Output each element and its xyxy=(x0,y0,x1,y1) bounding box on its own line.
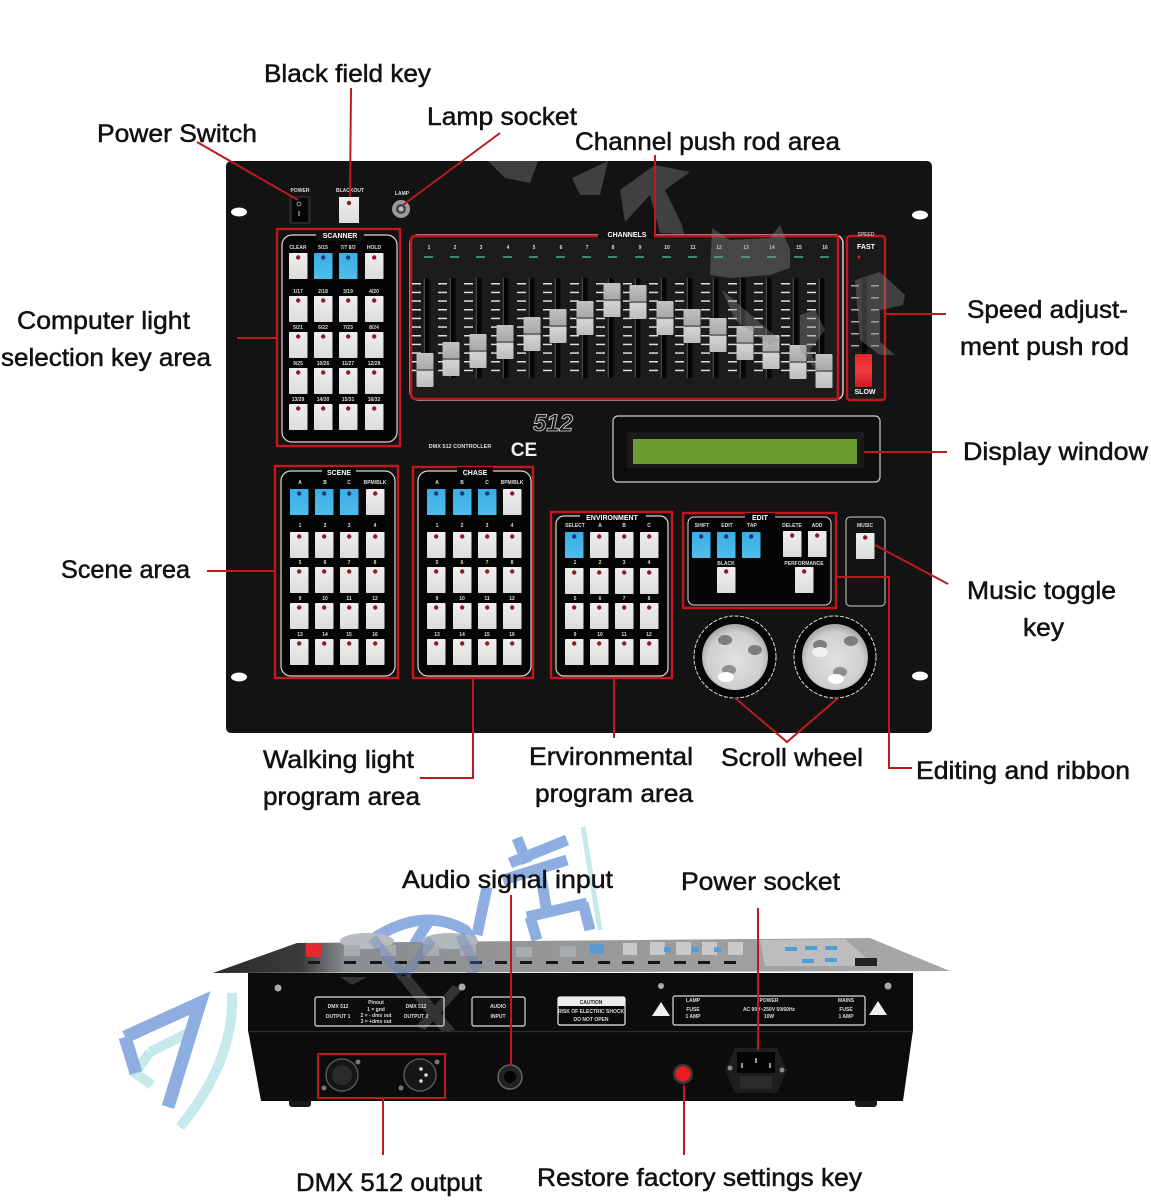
panel: environment keys: 11 xyxy=(621,632,627,638)
feet xyxy=(289,1098,877,1107)
panel: chase keys: 3 xyxy=(486,523,489,529)
panel: edit keys: SHIFT xyxy=(695,523,709,529)
panel: speed fader xyxy=(847,232,885,400)
logo 512 xyxy=(429,410,574,461)
panel: chase keys: 8 xyxy=(511,560,514,566)
panel: scene keys: 13 xyxy=(297,632,303,638)
panel: chase keys: 16 xyxy=(509,632,515,638)
label: music toggle: Music toggle xyxy=(967,577,1116,605)
power switch: POWER xyxy=(291,188,310,194)
panel: channel faders: 16 xyxy=(822,245,828,251)
panel: environment keys: 5 xyxy=(574,596,577,602)
panel: scanner keys: 11/27 xyxy=(342,361,354,367)
line: restore xyxy=(683,1085,685,1155)
label: dmx outputs: OUTPUT 1 xyxy=(326,1014,351,1020)
display window xyxy=(613,416,880,482)
label: audio input xyxy=(472,997,525,1026)
label: dmx outputs: 3 = +dmx out xyxy=(361,1019,392,1025)
line: channel push rod xyxy=(654,155,656,235)
label: environmental: Ervironmental xyxy=(529,743,693,771)
panel: scanner keys: 5/15 xyxy=(318,245,328,251)
audio jack xyxy=(498,1065,522,1089)
warning triangle right xyxy=(869,1001,887,1015)
label: computer light: Computer light xyxy=(17,307,190,335)
panel: edit keys: PERFORMANCE xyxy=(784,561,824,567)
label: power specs: 10W xyxy=(764,1014,774,1020)
panel: chase keys: BPM/BLK xyxy=(501,480,524,486)
panel: channel faders: 15 xyxy=(796,245,802,251)
label: caution xyxy=(558,997,625,1025)
music key: MUSIC xyxy=(857,523,873,529)
line: environment xyxy=(613,678,615,738)
label: selection area: selection key area xyxy=(1,344,211,372)
panel: edit keys: EDIT xyxy=(752,515,769,522)
label: dmx outputs: DMX 512 xyxy=(328,1004,349,1010)
fader caps xyxy=(416,283,832,388)
panel: chase keys: 9 xyxy=(436,596,439,602)
panel: chase keys: B xyxy=(460,480,464,486)
panel: scene keys: 4 xyxy=(374,523,377,529)
panel: chase keys: 4 xyxy=(511,523,514,529)
label: power specs: 1 AMP xyxy=(838,1014,854,1020)
fader tracks xyxy=(412,278,824,378)
panel: scanner keys: 8/24 xyxy=(369,325,379,331)
label: ment push rod: ment push rod xyxy=(960,333,1129,361)
panel: environment keys: ENVIRONMENT xyxy=(586,515,639,522)
panel: scanner keys: 6/22 xyxy=(318,325,328,331)
panel: environment keys: 1 xyxy=(574,560,577,566)
xlr female connector xyxy=(322,1059,360,1091)
panel: environment keys: A xyxy=(598,523,602,529)
label: scene area: Scene area xyxy=(61,556,190,584)
panel: scene keys: 9 xyxy=(299,596,302,602)
panel: scanner keys: 2/18 xyxy=(318,289,328,295)
panel: chase keys: 13 xyxy=(434,632,440,638)
line: scene xyxy=(207,570,275,572)
panel: speed fader: SPEED xyxy=(858,232,875,238)
label: dmx output: DMX 512 output xyxy=(296,1169,482,1197)
label: walking light: Walking light xyxy=(263,746,414,774)
body watermark xyxy=(340,975,462,1032)
line: music key xyxy=(875,545,948,584)
label: channel area: Channel push rod area xyxy=(575,128,840,156)
panel: edit keys: BLACK xyxy=(717,561,735,567)
panel: chase keys: 15 xyxy=(484,632,490,638)
power switch xyxy=(289,188,311,224)
panel: environment keys: 6 xyxy=(599,596,602,602)
scroll wheel left xyxy=(694,616,776,698)
line: power switch xyxy=(197,142,298,200)
rear body xyxy=(248,973,913,1101)
panel: rear view xyxy=(213,933,950,1107)
line: speed fader xyxy=(885,313,946,315)
panel: environment keys: SELECT xyxy=(565,523,585,529)
panel: channel faders: 11 xyxy=(690,245,696,251)
panel: channel faders: 7 xyxy=(586,245,589,251)
panel: channel faders: 8 xyxy=(612,245,615,251)
warning triangle left xyxy=(652,1002,670,1016)
panel: scene keys: B xyxy=(323,480,327,486)
panel: channel faders: 5 xyxy=(533,245,536,251)
restore button xyxy=(673,1064,693,1084)
label: program area: program area xyxy=(263,783,420,811)
label: dmx outputs xyxy=(315,997,444,1026)
panel: scanner keys xyxy=(277,229,400,446)
panel: environment keys: B xyxy=(622,523,626,529)
logo 512: 512 xyxy=(533,410,574,437)
blackout key xyxy=(336,188,364,223)
panel: scanner keys: 3/19 xyxy=(343,289,353,295)
power socket xyxy=(725,1048,787,1093)
logo 512: CE xyxy=(511,440,537,461)
line: scroll wheel xyxy=(735,698,838,742)
panel: chase keys: 11 xyxy=(484,596,490,602)
line: display window xyxy=(864,451,947,453)
line: power socket xyxy=(757,908,759,1050)
plate watermark tint xyxy=(372,935,478,975)
panel: chase keys: 12 xyxy=(509,596,515,602)
panel: front controller xyxy=(226,161,932,733)
label: power specs: MAINS xyxy=(838,998,855,1004)
screws xyxy=(274,982,892,992)
line: audio xyxy=(510,895,512,1066)
line: computer light keys xyxy=(237,337,277,339)
panel: environment keys: 8 xyxy=(648,596,651,602)
panel: channel faders: 4 xyxy=(507,245,510,251)
panel: scene keys: BPM/BLK xyxy=(364,480,387,486)
line: black field key xyxy=(350,88,351,197)
panel: chase keys: 5 xyxy=(436,560,439,566)
panel: channel faders: 1 xyxy=(428,245,431,251)
label: audio input: INPUT xyxy=(490,1014,506,1020)
label: dmx outputs: OUTPUT 2 xyxy=(404,1014,429,1020)
label: scroll wheel: Scroll wheel xyxy=(721,744,863,772)
label: dmx outputs: DMX 512 xyxy=(406,1004,427,1010)
panel: channel faders: 12 xyxy=(716,245,722,251)
scroll wheel right xyxy=(794,616,876,698)
blackout key: BLACKOUT xyxy=(336,188,364,194)
label: key: key xyxy=(1023,614,1065,642)
label: caution: CAUTION xyxy=(580,1000,603,1006)
label: speed adjust: Speed adjust- xyxy=(967,296,1128,324)
label: lamp socket: Lamp socket xyxy=(427,103,577,131)
xlr male connector xyxy=(398,1059,440,1091)
panel: scene keys: 3 xyxy=(348,523,351,529)
panel: scene keys: A xyxy=(298,480,302,486)
panel: channel faders xyxy=(410,229,843,400)
panel: scene keys: SCENE xyxy=(327,470,351,477)
panel: channel faders: 6 xyxy=(560,245,563,251)
label: power switch: Power Switch xyxy=(97,120,257,148)
panel: scanner keys: 14/30 xyxy=(317,397,329,403)
panel: edit keys: ADD xyxy=(812,523,823,529)
panel: scene keys: 2 xyxy=(324,523,327,529)
panel: chase keys xyxy=(413,467,533,678)
panel: scene keys: C xyxy=(347,480,351,486)
panel: edit keys: DELETE xyxy=(782,523,803,529)
panel: channel faders: 3 xyxy=(480,245,483,251)
panel watermark xyxy=(488,161,905,375)
panel: scanner keys: 12/28 xyxy=(368,361,380,367)
watermark behind rear view xyxy=(125,827,600,1127)
mounting slots xyxy=(231,208,928,682)
label: power socket: Power socket xyxy=(681,868,840,896)
label: caution: RISK OF ELECTRIC SHOCK xyxy=(558,1009,624,1015)
panel: environment keys: 4 xyxy=(648,560,651,566)
panel: edit keys: EDIT xyxy=(721,523,733,529)
label: caution: DO NOT OPEN xyxy=(573,1017,609,1023)
lamp socket: LAMP xyxy=(395,191,410,197)
panel: scene keys: 5 xyxy=(299,560,302,566)
logo 512: DMX 512 CONTROLLER xyxy=(429,444,491,450)
panel: scanner keys: 16/32 xyxy=(368,397,380,403)
panel: chase keys: C xyxy=(485,480,489,486)
panel: chase keys: 14 xyxy=(459,632,465,638)
panel: scene keys xyxy=(275,466,398,678)
music key xyxy=(846,517,885,606)
callout lines xyxy=(197,88,948,1155)
panel: scene keys: 14 xyxy=(322,632,328,638)
panel: scene keys: 16 xyxy=(372,632,378,638)
panel: scene keys: 6 xyxy=(324,560,327,566)
lamp socket xyxy=(392,191,410,218)
watermark logo xyxy=(125,993,232,1127)
panel: scanner keys: 15/31 xyxy=(342,397,354,403)
panel: scanner keys: 4/20 xyxy=(369,289,379,295)
label: power specs xyxy=(673,996,865,1025)
top plate xyxy=(213,933,950,973)
panel: environment keys: 7 xyxy=(623,596,626,602)
channel leds xyxy=(424,256,829,258)
label: restore key: Restore factory settings key xyxy=(537,1164,863,1192)
label: dmx outputs: 2 = - dmx out xyxy=(361,1013,392,1019)
panel: chase keys: A xyxy=(435,480,439,486)
panel: edit keys: TAP xyxy=(747,523,757,529)
panel: scanner keys: HOLD xyxy=(367,245,381,251)
label: power specs: FUSE xyxy=(839,1007,853,1013)
panel: speed fader: SLOW xyxy=(854,389,876,396)
panel: scanner keys: 13/29 xyxy=(292,397,304,403)
panel: chase keys: 7 xyxy=(486,560,489,566)
panel: channel faders: CHANNELS xyxy=(608,232,647,239)
panel: channel faders: 2 xyxy=(454,245,457,251)
panel: chase keys: CHASE xyxy=(463,470,488,477)
label: display window: Display window xyxy=(963,438,1149,466)
watermark characters xyxy=(367,827,600,978)
panel: chase keys: 6 xyxy=(461,560,464,566)
panel: scene keys: 7 xyxy=(348,560,351,566)
panel: scanner keys: 7/7 8/3 xyxy=(340,245,356,251)
panel: scene keys: 10 xyxy=(322,596,328,602)
label: dmx outputs: 1 = gnd xyxy=(367,1007,385,1013)
panel: channel faders: 10 xyxy=(664,245,670,251)
panel: scene keys: 12 xyxy=(372,596,378,602)
panel: scene keys: 1 xyxy=(299,523,302,529)
panel: scene keys: 15 xyxy=(346,632,352,638)
panel: speed fader: FAST xyxy=(857,244,876,251)
panel: environment keys: 10 xyxy=(597,632,603,638)
panel: scanner keys: 9/25 xyxy=(293,361,303,367)
panel: scanner keys: 7/23 xyxy=(343,325,353,331)
panel: channel faders: 14 xyxy=(769,245,775,251)
panel: environment keys: 2 xyxy=(599,560,602,566)
panel: scanner keys: 10/26 xyxy=(317,361,329,367)
panel: scanner keys: SCANNER xyxy=(323,233,357,240)
label: power specs: AC 90V~250V 50/60Hz xyxy=(743,1007,796,1013)
line: editing xyxy=(836,577,912,768)
panel: environment keys: 9 xyxy=(574,632,577,638)
label: power specs: LAMP xyxy=(686,998,701,1004)
panel: chase keys: 2 xyxy=(461,523,464,529)
panel: chase keys: 10 xyxy=(459,596,465,602)
panel: scanner keys: 1/17 xyxy=(293,289,303,295)
panel: scanner keys: CLEAR xyxy=(289,245,307,251)
panel: edit keys xyxy=(683,513,836,608)
label: editing and ribbon: Editing and ribbon xyxy=(916,757,1130,785)
label: audio input: AUDIO xyxy=(490,1004,506,1010)
panel: environment keys: 12 xyxy=(646,632,652,638)
line: lamp socket xyxy=(403,133,500,205)
label: black field key: Black field key xyxy=(264,60,432,88)
label: environmental program area: program area xyxy=(535,780,693,808)
label: power specs: FUSE xyxy=(686,1007,700,1013)
label: audio signal input: Audio signal input xyxy=(402,866,613,894)
line: walking light xyxy=(420,678,473,778)
panel: environment keys xyxy=(551,512,672,678)
panel: scene keys: 11 xyxy=(346,596,352,602)
panel: environment keys: 3 xyxy=(623,560,626,566)
panel: scanner keys: 5/21 xyxy=(293,325,303,331)
label: power specs: 1 AMP xyxy=(685,1014,701,1020)
label: power specs: POWER xyxy=(760,998,779,1004)
panel: chase keys: 1 xyxy=(436,523,439,529)
panel: channel faders: 9 xyxy=(639,245,642,251)
label: dmx outputs: Pinout xyxy=(368,1000,384,1006)
panel: environment keys: C xyxy=(647,523,651,529)
panel: channel faders: 13 xyxy=(743,245,749,251)
panel: scene keys: 8 xyxy=(374,560,377,566)
line: dmx output xyxy=(318,1054,445,1155)
